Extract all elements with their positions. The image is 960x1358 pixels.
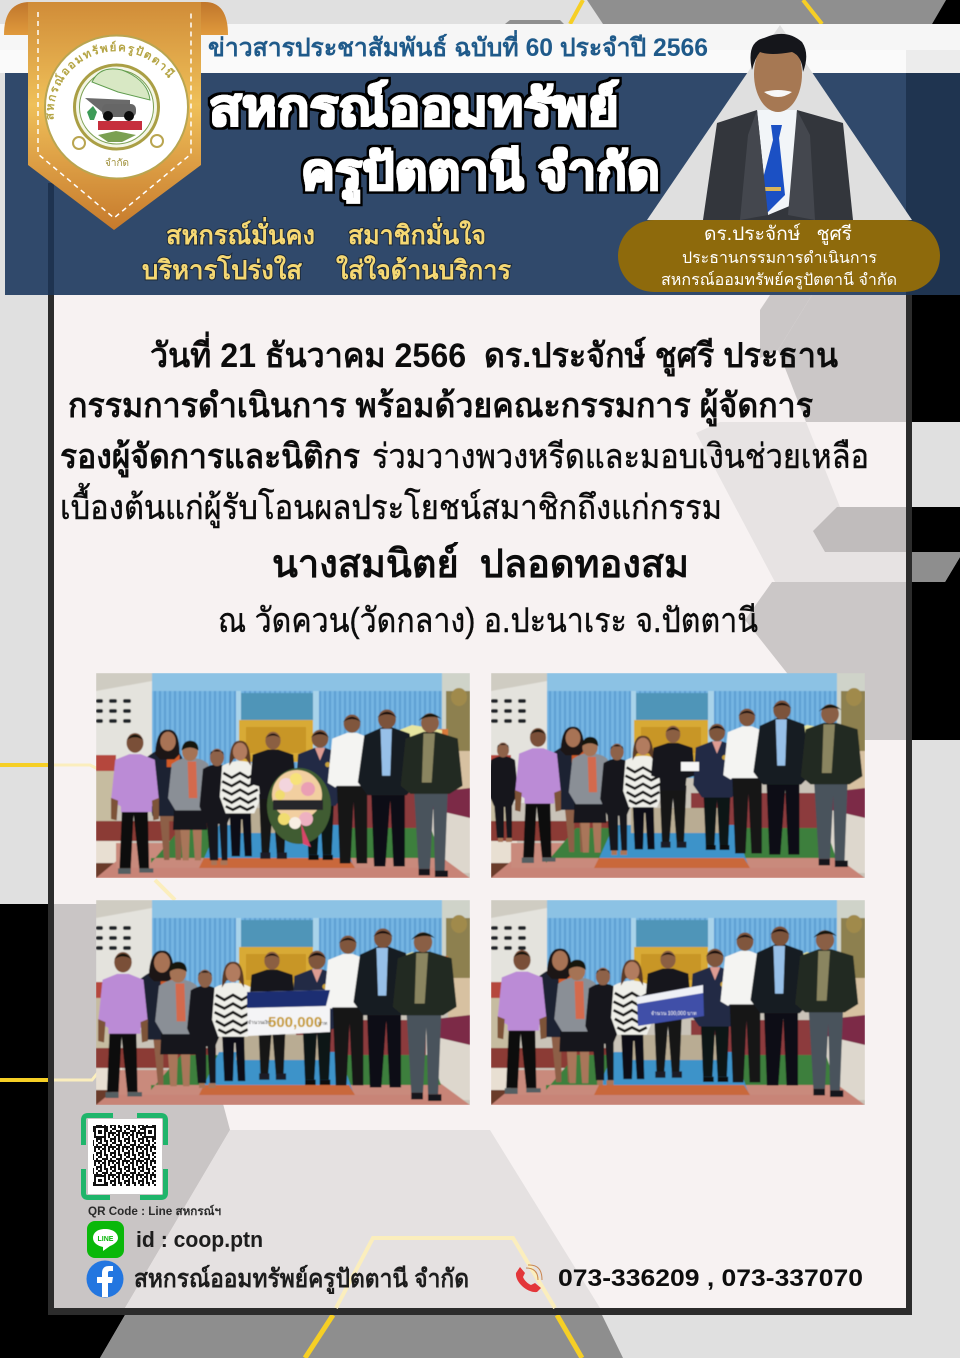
main title: ครูปัตตานี จำกัด [301,144,660,203]
icon: phone [516,1265,542,1292]
photo: handing over envelope [491,673,865,878]
photo: laying the wreath [96,673,470,878]
QR code [84,1116,166,1198]
phone numbers: 073-336209 , 073-337070 [558,1265,863,1292]
photo: cheque 500,000 [96,900,470,1105]
slogans: ใส่ใจด้านบริการ [336,255,511,285]
seal: จำกัด [105,158,129,169]
news body text: ร่วมวางพวงหรีดและมอบเงินช่วยเหลือ [372,438,869,476]
slogans [142,216,511,285]
presentation cheque: 500,000 [268,1014,322,1031]
chairman name pill: ดร.ประจักษ์ ชูศรี [704,223,852,245]
chairman portrait [703,34,853,220]
news body text: วันที่ 21 ธันวาคม 2566 ดร.ประจักษ์ ชูศรี ประธาน [150,331,838,377]
LINE id: id : coop.ptn [136,1227,263,1252]
news body text: รองผู้จัดการและนิติกร [60,438,361,478]
main title [209,80,660,203]
presentation cheque: จำนวนเงิน [248,1019,272,1026]
main title: สหกรณ์ออมทรัพย์ [209,80,619,136]
icon: LINE: LINE [98,1236,114,1243]
news body text [60,331,869,640]
header band [5,73,906,295]
news body text: ณ วัดควน(วัดกลาง) อ.ปะนาเระ จ.ปัตตานี [218,602,758,640]
photo: blue donation board [491,900,865,1105]
Facebook name: สหกรณ์ออมทรัพย์ครูปัตตานี จำกัด [134,1264,469,1295]
ribbon with cooperative seal [4,2,228,230]
chairman name pill [618,220,940,292]
news body text: เบื้องต้นแก่ผู้รับโอนผลประโยชน์สมาชิกถึงแก่กรรม [60,483,722,528]
presentation cheque [247,990,330,1036]
flower wreath [267,768,331,847]
donation board [637,985,704,1026]
slogans: บริหารโปร่งใส [142,254,302,285]
slogans: สมาชิกมั่นใจ [348,216,486,250]
presentation cheque: บาท [318,1021,327,1027]
QR caption: QR Code : Line สหกรณ์ฯ [88,1204,221,1218]
news body text: กรรมการดำเนินการ พร้อมด้วยคณะกรรมการ ผู้จัดการ [68,387,814,427]
chairman name pill: สหกรณ์ออมทรัพย์ครูปัตตานี จำกัด [661,270,897,290]
donation board: จำนวน 100,000 บาท [651,1011,697,1017]
seal: สหกรณ์ออมทรัพย์ครูปัตตานี [46,40,176,120]
icon: Facebook [86,1260,124,1298]
envelope [681,762,699,771]
seal [44,34,189,180]
icon: LINE [87,1221,124,1258]
triangle behind chairman [647,25,912,220]
chairman name pill: ประธานกรรมการดำเนินการ [682,250,877,267]
news body text: นางสมนิตย์ ปลอดทองสม [272,541,689,586]
content panel [48,295,912,1315]
slogans: สหกรณ์มั่นคง [166,216,315,250]
newsletter line: ข่าวสารประชาสัมพันธ์ ฉบับที่ 60 ประจำปี 2566 [208,30,708,62]
